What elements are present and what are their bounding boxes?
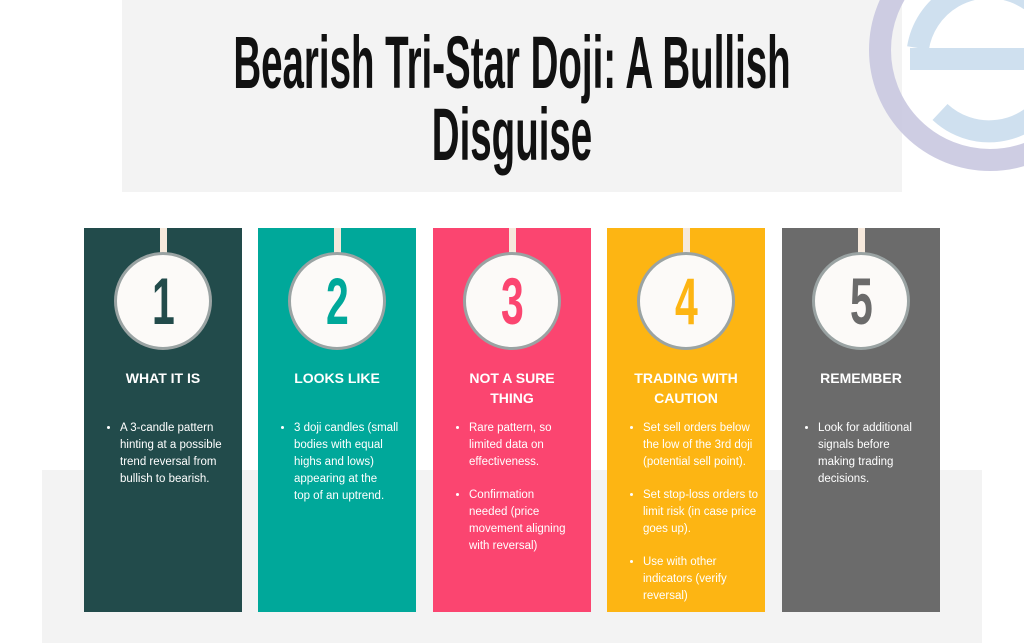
text 5: Look for additional [818, 422, 912, 434]
text 2: bodies with equal [294, 439, 383, 451]
title background [122, 0, 902, 192]
logo [869, 0, 1024, 171]
heading 1: WHAT IT IS [126, 370, 200, 386]
bottom background band [42, 470, 982, 643]
number 1: 1 [152, 264, 174, 338]
text 3: Rare pattern, so [469, 422, 551, 434]
number 2: 2 [326, 264, 348, 338]
text 3 [456, 422, 566, 552]
text 4: reversal) [643, 590, 688, 602]
number 4: 4 [675, 264, 697, 338]
number 4 [637, 252, 735, 350]
number 2 [288, 252, 386, 350]
text 2: 3 doji candles (small [294, 422, 398, 434]
text 3: Confirmation [469, 489, 534, 501]
number 1 [114, 252, 212, 350]
text 4: limit risk (in case price [643, 506, 756, 518]
heading 4 [634, 370, 738, 406]
panel 4 [607, 228, 765, 612]
heading 4: TRADING WITH [634, 370, 738, 386]
text 1: trend reversal from [120, 456, 217, 468]
panel 5 [782, 228, 940, 612]
text 5: making trading [818, 456, 893, 468]
text 3: effectiveness. [469, 456, 539, 468]
number 5 [812, 252, 910, 350]
number 5: 5 [850, 264, 872, 338]
text 2: appearing at the [294, 473, 377, 485]
text 4: Set sell orders below [643, 422, 750, 434]
text 3: needed (price [469, 506, 539, 518]
heading 5: REMEMBER [820, 370, 902, 386]
heading 4: CAUTION [654, 390, 718, 406]
text 4: Set stop-loss orders to [643, 489, 758, 501]
text 3: with reversal) [469, 540, 537, 552]
text 3: movement aligning [469, 523, 566, 535]
text 1: hinting at a possible [120, 439, 222, 451]
text 3: limited data on [469, 439, 544, 451]
heading 3: THING [490, 390, 534, 406]
title: Disguise [432, 93, 592, 176]
text 5 [805, 422, 912, 485]
text 1: bullish to bearish. [120, 473, 210, 485]
text 4 [630, 422, 758, 602]
title [233, 21, 791, 176]
heading 3 [469, 370, 555, 406]
text 5: signals before [818, 439, 890, 451]
panel 3 [433, 228, 591, 612]
number 3: 3 [501, 264, 523, 338]
text 4: (potential sell point). [643, 456, 746, 468]
text 2: top of an uptrend. [294, 490, 384, 502]
text 4: the low of the 3rd doji [643, 439, 752, 451]
text 4: Use with other [643, 556, 717, 568]
text 2: highs and lows) [294, 456, 374, 468]
text 1: A 3-candle pattern [120, 422, 213, 434]
number 3 [463, 252, 561, 350]
text 5: decisions. [818, 473, 869, 485]
text 1 [107, 422, 222, 485]
panel 1 [84, 228, 242, 612]
heading 2: LOOKS LIKE [294, 370, 380, 386]
panel 2 [258, 228, 416, 612]
text 4: goes up). [643, 523, 691, 535]
text 2 [281, 422, 398, 502]
text 4: indicators (verify [643, 573, 727, 585]
heading 3: NOT A SURE [469, 370, 555, 386]
title: Bearish Tri-Star Doji: A Bullish [233, 21, 791, 104]
